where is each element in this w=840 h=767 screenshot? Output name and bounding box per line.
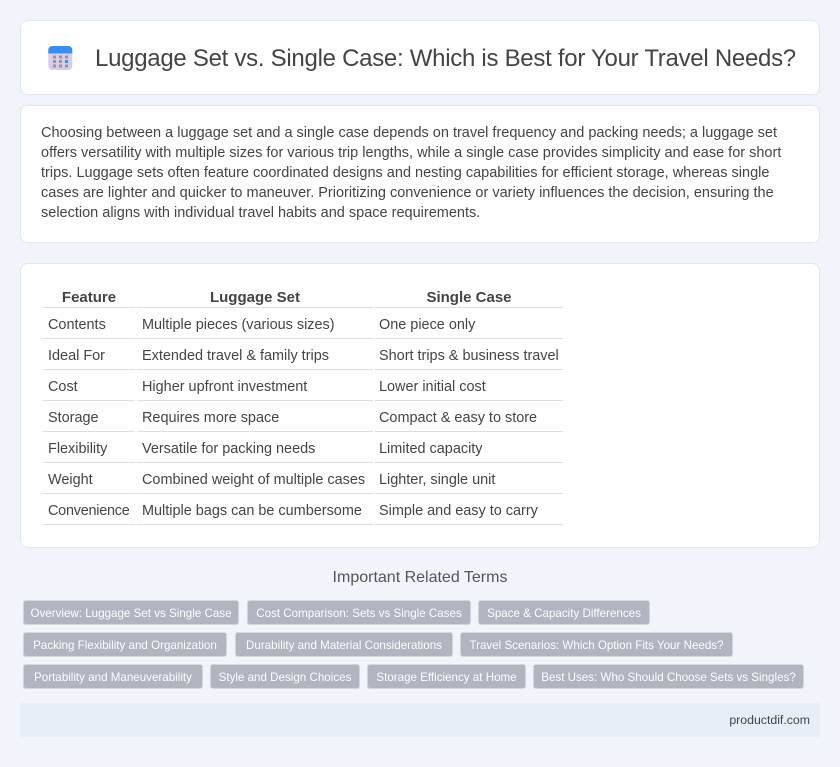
table: feature comparison: Lower initial cost (379, 379, 486, 395)
table: feature comparison: Extended travel & family trips (142, 348, 329, 364)
tags: related terms (23, 600, 804, 689)
tags: related terms: Storage Efficiency at Home (376, 671, 517, 684)
table: feature comparison: Requires more space (142, 410, 279, 426)
text block: intro paragraph: Choosing between a luggage set and a single case depends on travel frequency and packing needs; a luggage set (41, 125, 777, 141)
text block: intro paragraph (41, 125, 782, 221)
table: feature comparison: Multiple bags can be cumbersome (142, 503, 362, 519)
text block: intro paragraph: selection aligns with individual travel habits and space requirements. (41, 205, 480, 221)
tags: related terms: Style and Design Choices (219, 671, 351, 684)
text block: intro paragraph: cases are lighter and quicker to maneuver. Prioritizing convenience or variety influences the decision, ensuring the (41, 185, 774, 201)
table: feature comparison: Compact & easy to store (379, 410, 537, 426)
table: feature comparison: Convenience (48, 503, 130, 519)
tags: related terms: Portability and Maneuverability (34, 671, 192, 684)
table: feature comparison: Combined weight of multiple cases (142, 472, 365, 488)
table: feature comparison: Multiple pieces (various sizes) (142, 317, 335, 333)
table: feature comparison: Luggage Set (210, 289, 300, 306)
table: feature comparison: Ideal For (48, 348, 105, 364)
panel: header (20, 20, 820, 95)
table: feature comparison: Storage (48, 410, 99, 426)
table: feature comparison: Versatile for packing needs (142, 441, 315, 457)
table: feature comparison: Limited capacity (379, 441, 483, 457)
tags: related terms: Best Uses: Who Should Choose Sets vs Singles? (541, 671, 796, 684)
table: feature comparison: Short trips & business travel (379, 348, 559, 364)
panel: comparison table (20, 263, 820, 548)
footer: productdif.com (729, 713, 810, 727)
table: feature comparison: One piece only (379, 317, 475, 333)
text block: intro paragraph: trips. Luggage sets often feature coordinated designs and nesting capabilities for efficient storage, whereas single (41, 165, 769, 181)
table: feature comparison (43, 289, 563, 525)
panel: intro (20, 105, 820, 243)
tags: related terms: Cost Comparison: Sets vs Single Cases (256, 607, 462, 620)
table: feature comparison: Feature (62, 289, 116, 306)
table: feature comparison: Contents (48, 317, 106, 333)
tags: related terms: Overview: Luggage Set vs Single Case (30, 607, 232, 620)
table: feature comparison: Lighter, single unit (379, 472, 495, 488)
table: feature comparison: Flexibility (48, 441, 107, 457)
table: feature comparison: Cost (48, 379, 78, 395)
table: feature comparison: Single Case (426, 289, 512, 306)
tags: related terms: Space & Capacity Differences (487, 607, 641, 620)
title: Luggage Set vs. Single Case: Which is Best for Your Travel Needs? (95, 45, 796, 72)
heading: related terms: Important Related Terms (333, 569, 507, 586)
text block: intro paragraph: offers versatility with multiple sizes for various trip lengths, while a single case provides simplicity and ease for short (41, 145, 781, 161)
tags: related terms: Packing Flexibility and Organization (33, 639, 217, 652)
table: feature comparison: Weight (48, 472, 93, 488)
table: feature comparison: Simple and easy to carry (379, 503, 538, 519)
table: feature comparison: Higher upfront investment (142, 379, 307, 395)
icon: calendar (48, 46, 72, 70)
footer (20, 703, 820, 737)
tags: related terms: Travel Scenarios: Which Option Fits Your Needs? (469, 639, 724, 652)
tags: related terms: Durability and Material Considerations (246, 639, 442, 652)
